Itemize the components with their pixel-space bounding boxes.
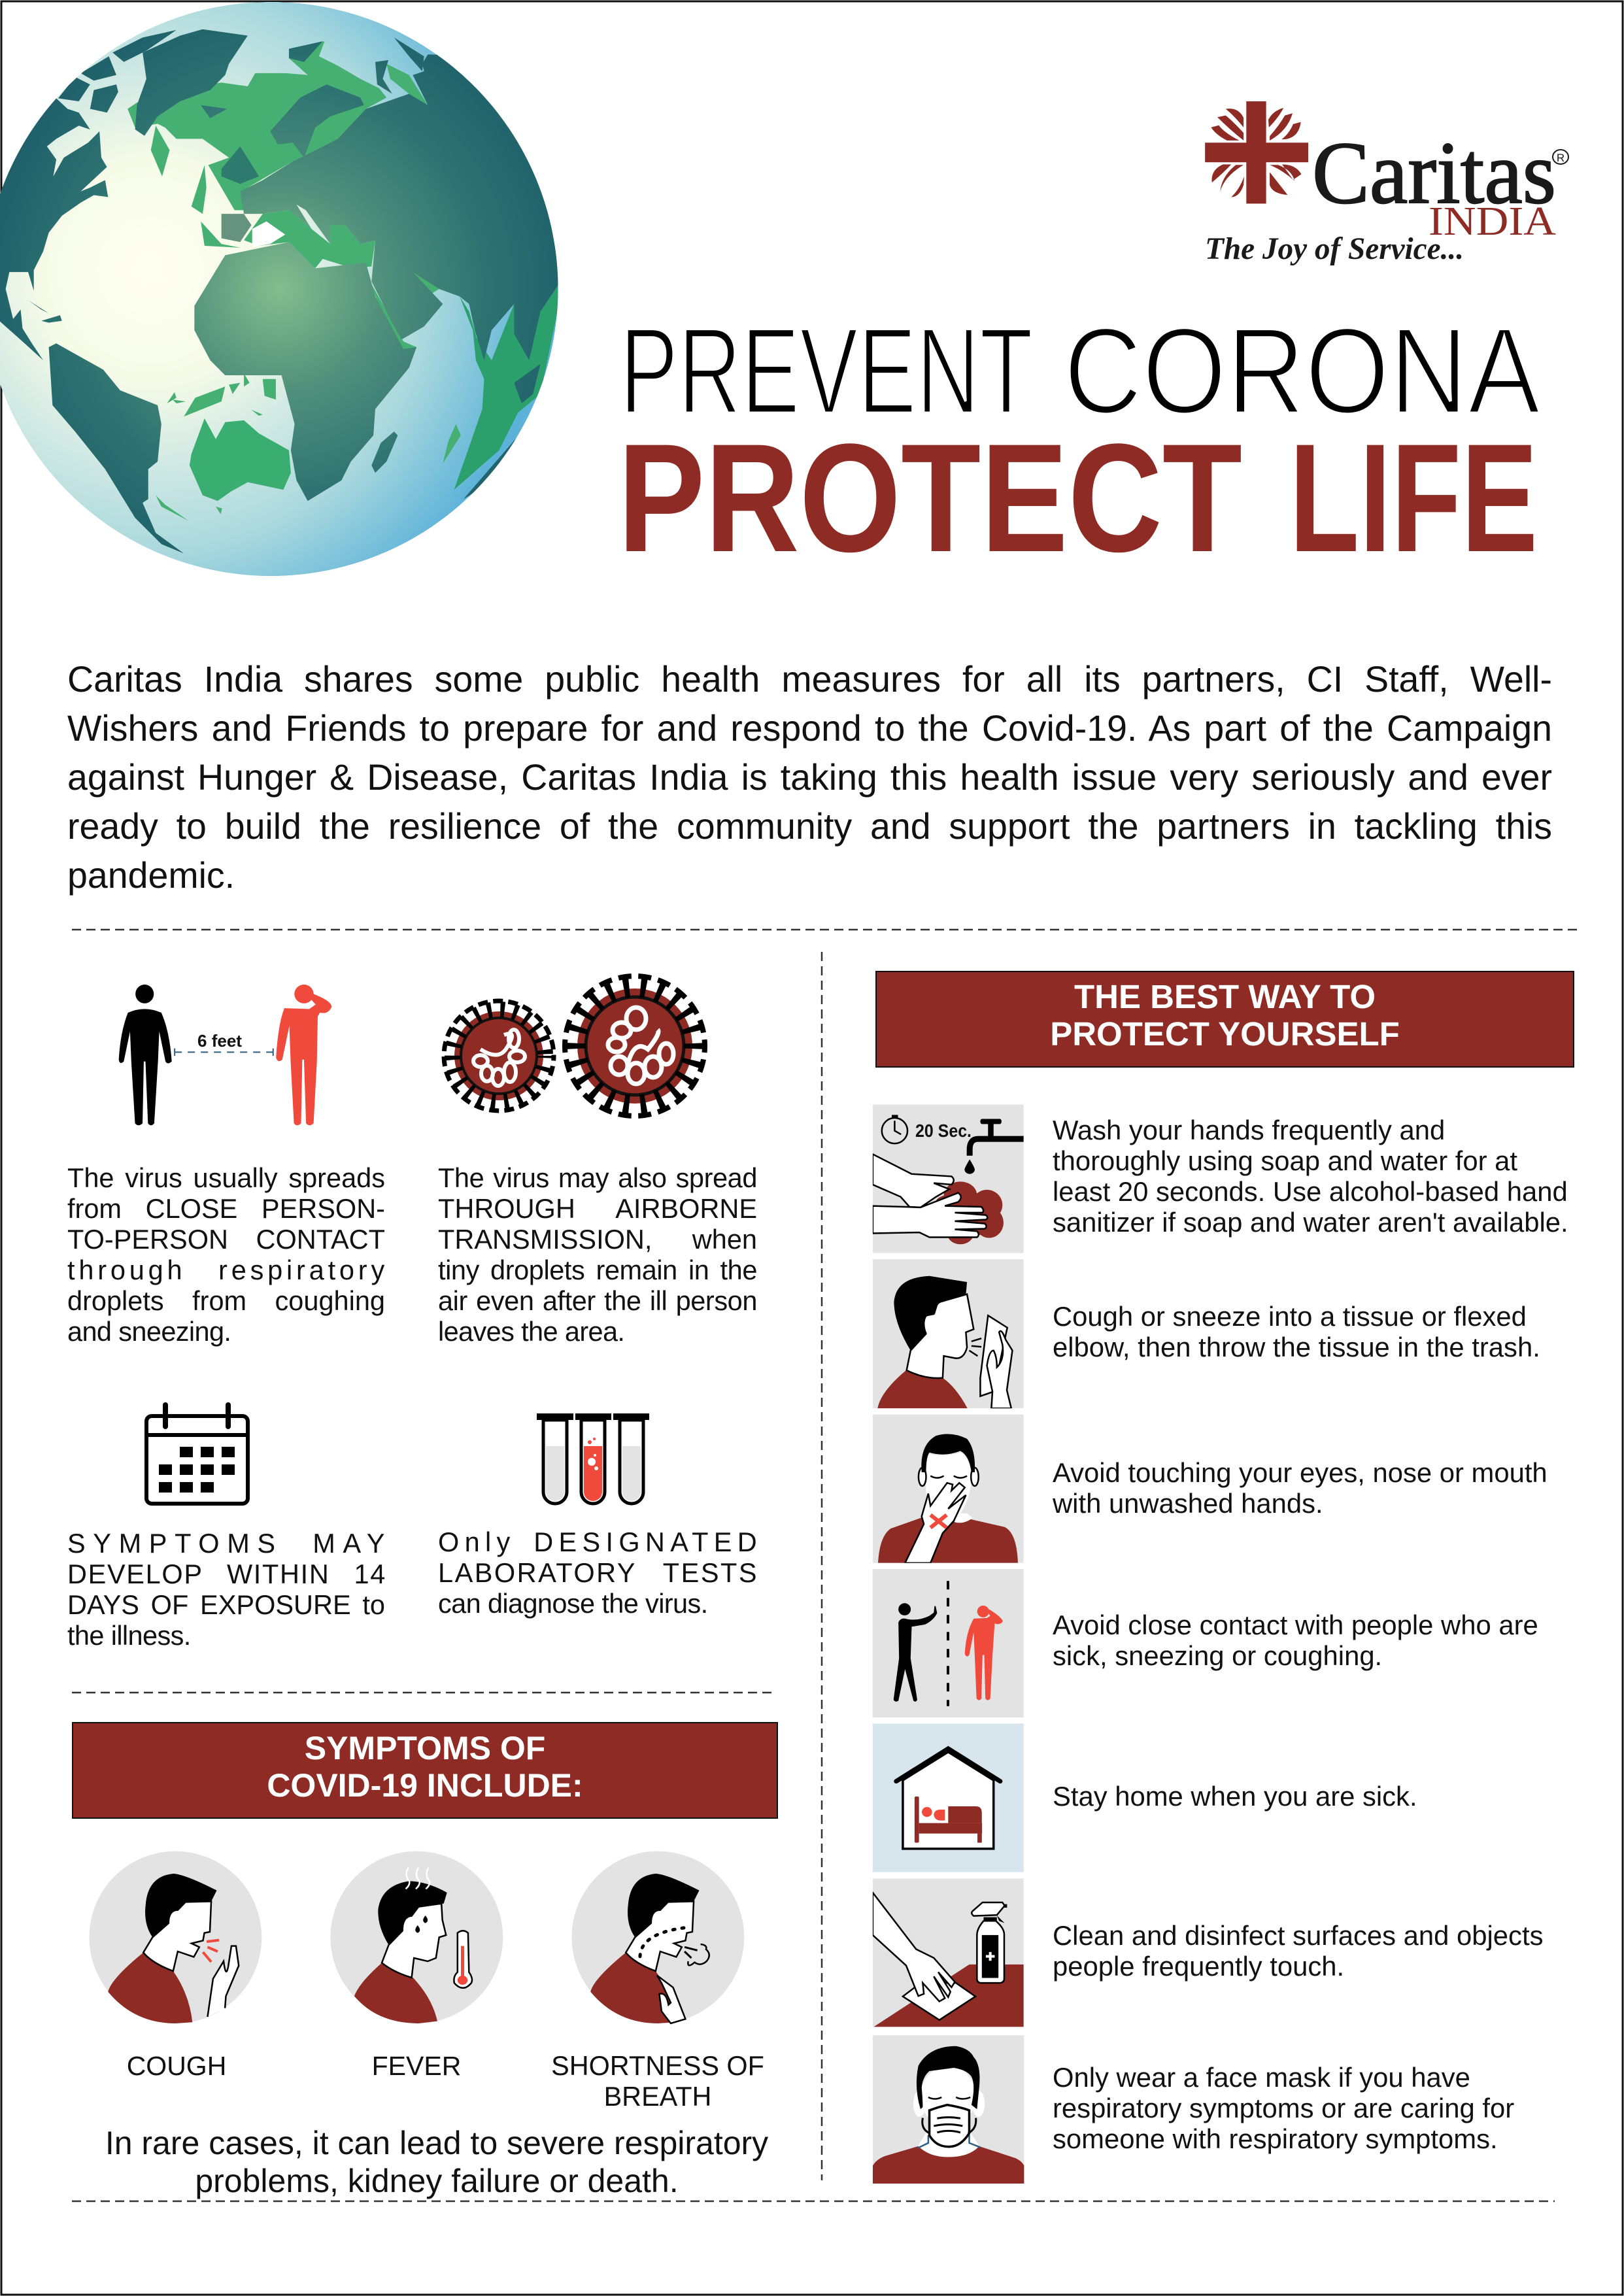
text: cough or sneeze: elbow, then throw the tissue in the trash. <box>1053 1332 1540 1362</box>
text: close contact spread: and sneezing. <box>67 1316 231 1347</box>
text: rare cases: In rare cases, it can lead to severe respiratory <box>105 2125 768 2161</box>
text: close contact spread: droplets from coughing <box>67 1285 385 1316</box>
text: avoid touching: Avoid touching your eyes, nose or mouth <box>1053 1457 1548 1488</box>
text: laboratory tests <box>438 1527 762 1619</box>
text: airborne spread <box>438 1162 757 1347</box>
text: airborne spread: tiny droplets remain in the <box>438 1255 757 1285</box>
globe <box>0 2 600 576</box>
text: symptoms timing: DAYS OF EXPOSURE to <box>67 1589 385 1620</box>
text: face mask: respiratory symptoms or are caring for <box>1053 2093 1514 2123</box>
text: close contact spread: from CLOSE PERSON- <box>67 1193 385 1224</box>
text: avoid contact: sick, sneezing or coughing. <box>1053 1640 1382 1671</box>
icon: calendar <box>146 1405 248 1504</box>
icon: shortness of breath <box>571 1851 744 2023</box>
logo: wordmark: Caritas <box>1312 124 1556 222</box>
green land <box>127 41 563 521</box>
text: airborne spread: air even after the ill person <box>438 1285 757 1316</box>
text: rare cases <box>105 2125 768 2199</box>
logo: India: INDIA <box>1429 199 1556 244</box>
text: close contact spread: TO-PERSON CONTACT <box>67 1224 385 1255</box>
text: symptoms timing: SYMPTOMS MAY <box>67 1528 392 1559</box>
text: laboratory tests: can diagnose the virus. <box>438 1588 707 1619</box>
label: 20 sec: 20 Sec. <box>915 1121 972 1141</box>
title: protect life: LIFE <box>1289 412 1538 584</box>
label: fever: FEVER <box>372 2051 461 2081</box>
text: cough or sneeze <box>1053 1301 1540 1362</box>
text: face mask: someone with respiratory symptoms. <box>1053 2123 1498 2154</box>
text: wash hands: sanitizer if soap and water aren't available. <box>1053 1207 1568 1238</box>
text: rare cases: problems, kidney failure or death. <box>195 2163 679 2199</box>
logo: tagline: The Joy of Service... <box>1205 231 1464 266</box>
label: 6 feet: 6 feet <box>197 1031 242 1051</box>
text: disinfect <box>1053 1920 1543 1982</box>
text: avoid contact: Avoid close contact with people who are <box>1053 1610 1538 1640</box>
intro paragraph: ready to build the resilience of the community and support the partners in tackling this <box>67 806 1552 847</box>
logo: cross and petals <box>1205 101 1308 203</box>
text: laboratory tests: Only DESIGNATED <box>438 1527 762 1557</box>
icon tile: disinfect surfaces <box>873 1878 1024 2027</box>
icon tile: face mask <box>873 2035 1024 2184</box>
banner: symptoms heading: SYMPTOMS OF <box>305 1730 545 1766</box>
text: avoid touching: with unwashed hands. <box>1053 1488 1323 1519</box>
logo: registered mark: R <box>1557 152 1565 164</box>
text: wash hands: thoroughly using soap and water for at <box>1053 1145 1517 1176</box>
icon tile: sneezing into tissue <box>873 1259 1024 1408</box>
intro paragraph: pandemic. <box>67 855 235 896</box>
icon: sick person <box>276 985 331 1125</box>
intro paragraph: Wishers and Friends to prepare for and respond to the Covid-19. As part of the Campaign <box>67 708 1552 749</box>
intro paragraph: Caritas India shares some public health measures for all its partners, CI Staff, Well- <box>67 659 1552 700</box>
icon: large virus <box>565 976 705 1116</box>
icon: small virus <box>444 1001 554 1111</box>
icon: healthy person <box>119 985 172 1125</box>
title: protect life: PROTECT <box>618 412 1242 584</box>
text: close contact spread: The virus usually spreads <box>67 1162 385 1193</box>
text: avoid touching <box>1053 1457 1548 1519</box>
banner: best way heading <box>875 971 1574 1068</box>
banner: symptoms heading: COVID-19 INCLUDE: <box>267 1767 583 1804</box>
intro paragraph: against Hunger & Disease, Caritas India is taking this health issue very seriously and ever <box>67 757 1552 798</box>
text: symptoms timing: DEVELOP WITHIN 14 <box>67 1559 386 1589</box>
banner: symptoms heading <box>72 1722 778 1819</box>
icon tile: stay home <box>873 1723 1024 1872</box>
logo: registered mark <box>1553 150 1568 164</box>
intro paragraph <box>67 659 1552 896</box>
title: prevent corona: CORONA <box>1064 302 1541 439</box>
banner: best way heading: PROTECT YOURSELF <box>1050 1015 1400 1053</box>
label: shortness of breath <box>551 2051 764 2112</box>
icon: six feet distance <box>119 985 331 1125</box>
label: shortness of breath: BREATH <box>604 2082 711 2112</box>
text: disinfect: people frequently touch. <box>1053 1951 1344 1982</box>
icon: coronaviruses <box>444 976 705 1116</box>
text: cough or sneeze: Cough or sneeze into a tissue or flexed <box>1053 1301 1527 1332</box>
icon tile: hand washing <box>873 1105 1024 1253</box>
text: symptoms timing: the illness. <box>67 1620 191 1651</box>
title: prevent corona <box>620 302 1541 439</box>
icon: cough <box>89 1851 262 2023</box>
label: shortness of breath: SHORTNESS OF <box>551 2051 764 2081</box>
title: prevent corona: PREVENT <box>620 302 1033 439</box>
logo: Caritas India <box>1205 101 1568 266</box>
arrow: distance <box>175 1049 273 1056</box>
label: cough: COUGH <box>127 2051 226 2081</box>
text: stay home: Stay home when you are sick. <box>1053 1781 1417 1812</box>
text: face mask <box>1053 2062 1514 2154</box>
dark land <box>0 29 600 554</box>
icon tile: keep distance <box>873 1569 1024 1717</box>
text: airborne spread: leaves the area. <box>438 1316 624 1347</box>
text: disinfect: Clean and disinfect surfaces and objects <box>1053 1920 1543 1951</box>
text: close contact spread <box>67 1162 388 1347</box>
text: airborne spread: THROUGH AIRBORNE <box>438 1193 757 1224</box>
text: airborne spread: TRANSMISSION, when <box>438 1224 757 1255</box>
text: wash hands: least 20 seconds. Use alcohol-based hand <box>1053 1176 1568 1207</box>
text: wash hands <box>1053 1115 1568 1238</box>
text: airborne spread: The virus may also spread <box>438 1162 757 1193</box>
text: avoid contact <box>1053 1610 1538 1671</box>
text: face mask: Only wear a face mask if you have <box>1053 2062 1470 2093</box>
text: laboratory tests: LABORATORY TESTS <box>438 1557 758 1588</box>
text: symptoms timing <box>67 1528 392 1651</box>
banner: best way heading: THE BEST WAY TO <box>1074 978 1376 1015</box>
icon: fever <box>330 1851 503 2023</box>
text: wash hands: Wash your hands frequently and <box>1053 1115 1445 1145</box>
icon: test tubes <box>537 1413 649 1504</box>
icon tile: touching face <box>873 1415 1024 1563</box>
text: close contact spread: through respiratory <box>67 1255 388 1285</box>
